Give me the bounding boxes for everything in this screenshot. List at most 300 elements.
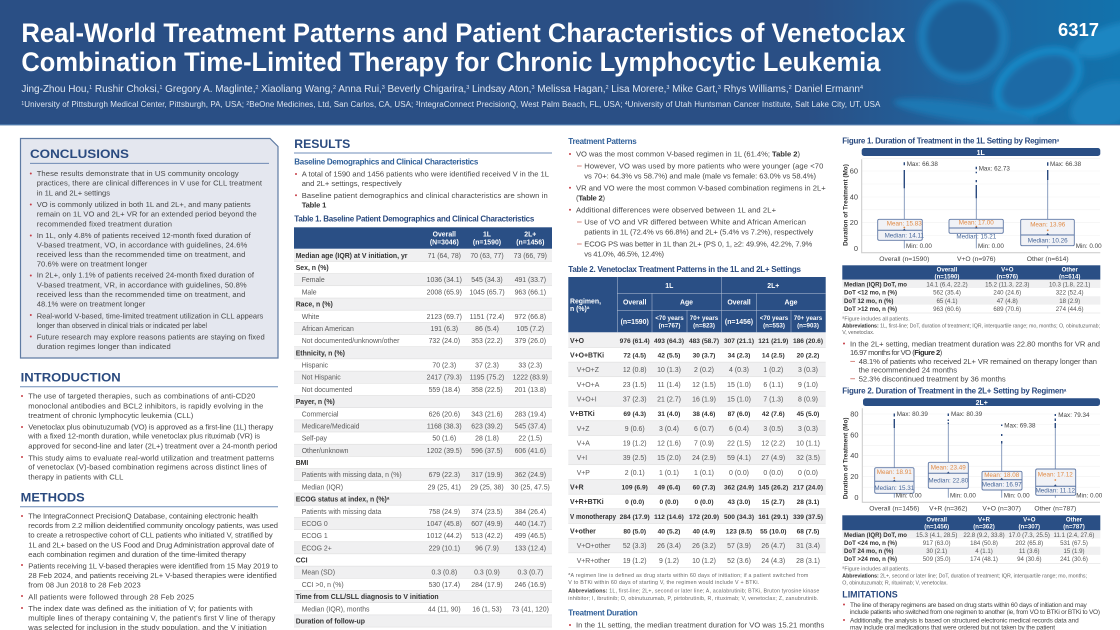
box plot: figure 2: V+R (n=362) bbox=[929, 506, 967, 513]
heading: limitations: LIMITATIONS bbox=[842, 589, 898, 600]
introduction bullets bbox=[21, 392, 277, 481]
table 2 header: Age bbox=[680, 300, 693, 307]
table 2 rows: 3 (0.5) bbox=[763, 426, 783, 433]
box plot: figure 2: 20 bbox=[850, 472, 858, 481]
table 2 footnotes bbox=[568, 572, 819, 602]
box: other 1L bbox=[1021, 161, 1102, 250]
figure 2 title: Figure 2. Duration of Treatment in the 2L+ Setting by Regimena bbox=[842, 387, 1067, 396]
figure 2 table: DoT 24 mo, n (%) bbox=[844, 548, 893, 555]
box: other 1L: Mean: 13.96 bbox=[1030, 222, 1066, 229]
table 2 rows: V+O+BTKi bbox=[570, 352, 604, 360]
table 2 rows: 3 (0.4) bbox=[659, 426, 679, 433]
table 2 footnotes: V to BTKi within 60 days of starting V, the regimen would include V + BTKi. bbox=[568, 580, 759, 586]
table 1 header: (N=3046) bbox=[430, 239, 459, 246]
table 1 rows: 201 (13.8) bbox=[515, 387, 546, 394]
table 1 rows: ECOG status at index, n (%)a bbox=[296, 495, 390, 504]
conclusions bullets: duration regimes longer than indicated bbox=[37, 342, 171, 351]
table 1 rows: 70 (2.3) bbox=[432, 362, 456, 370]
figure 2 table: 15 (1.9) bbox=[1063, 548, 1085, 555]
table 2 rows: V+other bbox=[570, 529, 596, 536]
table 2 rows: 0 (0.0) bbox=[763, 470, 783, 477]
table 1 rows: 246 (16.9) bbox=[515, 582, 546, 589]
table 1 rows: Patients with missing data bbox=[302, 509, 382, 516]
table 2 header: Age bbox=[784, 300, 798, 307]
title: Combination Time-Limited Therapy for Chronic Lymphocytic Leukemia bbox=[21, 47, 881, 77]
introduction bullets: approved for second-line and later (2L+) treatment over a 24-month period bbox=[28, 441, 277, 450]
table 1 rows: Hispanic bbox=[302, 362, 329, 370]
table 1 zebra shading bbox=[294, 249, 552, 627]
box: other 2L+: Min: 0.00 bbox=[1076, 493, 1103, 500]
box: V+R 2L+ bbox=[928, 411, 983, 500]
table 2 rows: 19 (1.2) bbox=[623, 558, 647, 565]
table 2 rows: 43 (3.0) bbox=[728, 499, 750, 506]
table 1 rows: 626 (20.6) bbox=[429, 411, 460, 418]
box: V+O 1L: Min: 0.00 bbox=[978, 243, 1004, 250]
figure 1 title: Figure 1. Duration of Treatment in the 1L Setting by Regimena bbox=[842, 136, 1059, 145]
treatment patterns bullets: Use of VO and VR differed between White and African American bbox=[584, 218, 806, 227]
table 2 header: (n=823) bbox=[693, 322, 715, 329]
treatment patterns bullets: Additional differences were observed between 1L and 2L+ bbox=[576, 206, 777, 215]
figure 2 table: 11.1 (2.4, 27.6) bbox=[1054, 532, 1094, 539]
table 2 rows: 32 (3.5) bbox=[796, 455, 820, 462]
table 2 rows: 40 (4.9) bbox=[693, 529, 715, 536]
box: V+R 2L+: Max: 80.39 bbox=[951, 411, 983, 418]
table 2 rows: 37 (2.3) bbox=[623, 396, 647, 404]
table 1 header: 2L+ bbox=[524, 232, 536, 239]
table 2 rows: 12 (0.8) bbox=[623, 367, 647, 374]
table 2 rows: 45 (5.0) bbox=[797, 411, 819, 418]
table 2 rows: 11 (1.4) bbox=[657, 382, 681, 389]
table 1 rows: 606 (41.6) bbox=[515, 448, 546, 455]
figure 2 footnotes: aFigure includes all patients. bbox=[842, 566, 910, 573]
table 2 rows: 6 (0.4) bbox=[729, 426, 749, 433]
table 2 title: Table 2. Venetoclax Treatment Patterns in the 1L and 2L+ Settings bbox=[568, 265, 802, 274]
table 1 rows: 1036 (34.1) bbox=[427, 277, 462, 284]
table 2 rows: 72 (4.5) bbox=[623, 352, 646, 360]
table 1 header bbox=[294, 227, 552, 249]
table 2 rows: 30 (3.7) bbox=[693, 352, 715, 360]
table 2 rows: 49 (6.4) bbox=[658, 484, 680, 492]
figure 2 table: V+O bbox=[1023, 516, 1036, 523]
figure 1 footnotes bbox=[842, 316, 1100, 336]
table 2 rows: 15 (2.0) bbox=[657, 455, 681, 462]
table 1 rows: 86 (5.4) bbox=[475, 326, 499, 333]
table 1 rows: 353 (22.2) bbox=[471, 338, 503, 345]
methods bullets: 28 Feb 2024, and patients receiving 2L+ V-based therapies were identified bbox=[28, 571, 277, 580]
introduction bullets: treatment of chronic lymphocytic leukemia (CLL) bbox=[28, 411, 194, 420]
table 2 rows: V+O+I bbox=[577, 396, 597, 404]
table 2 rows: 284 (17.9) bbox=[620, 514, 650, 521]
table 2 header: Regimen, bbox=[570, 299, 601, 306]
table 1 rows: 29 (25, 38) bbox=[470, 484, 504, 491]
conclusions bullets: In 2L+, only 1.1% of patients received 24-month fixed duration of bbox=[37, 271, 255, 280]
table 1 rows: Other/unknown bbox=[302, 448, 349, 455]
figure 2 table: DoT <24 mo, n (%) bbox=[844, 540, 897, 547]
table 2 rows: V+P bbox=[577, 470, 590, 477]
table 2 rows: 493 (64.3) bbox=[654, 338, 684, 345]
table 2 header: <70 years bbox=[655, 315, 684, 322]
figure 2 table: 11 (3.6) bbox=[1019, 548, 1040, 555]
table 1 header: 1L bbox=[483, 232, 491, 239]
table 1 header: (n=1456) bbox=[516, 239, 544, 246]
panel: results bbox=[294, 137, 552, 627]
table 1 rows: 596 (37.5) bbox=[471, 448, 503, 455]
table 2 rows: 172 (20.9) bbox=[689, 514, 719, 521]
poster number: 6317 bbox=[1058, 19, 1099, 40]
table 2 rows: 60 (7.3) bbox=[693, 484, 715, 492]
box: other 1L: Median: 10.26 bbox=[1028, 238, 1068, 245]
figure 1 table: DoT <12 mo, n (%) bbox=[844, 290, 897, 296]
treatment patterns bullets bbox=[569, 150, 826, 259]
panel: figure 1 bbox=[842, 136, 1102, 384]
table 1 rows: Commercial bbox=[302, 411, 339, 418]
methods bullets: multiple lines of therapy containing V, the patient's first V line of therapy bbox=[28, 614, 276, 623]
table 2 rows: 6 (1.1) bbox=[763, 382, 783, 389]
table 2 rows: 20 (2.2) bbox=[797, 352, 819, 360]
table 2 rows: 26 (3.4) bbox=[657, 543, 681, 550]
introduction bullets: monoclonal antibodies and BCL2 inhibitors, is rapidly evolving in the bbox=[28, 401, 263, 410]
figure 1 footnotes: V, venetoclax. bbox=[842, 330, 874, 336]
table 1 rows: African American bbox=[302, 326, 354, 333]
methods bullets: The IntegraConnect PrecisionQ Database, containing electronic health bbox=[28, 512, 258, 521]
limitations bullets: Additionally, the analysis is based on structured electronic medical records data and bbox=[850, 618, 1079, 624]
title: Real-World Treatment Patterns and Patient Characteristics of Venetoclax bbox=[21, 18, 906, 48]
box plot: figure 2: Other (n=787) bbox=[1034, 506, 1076, 513]
table 1 rows: 73 (41, 120) bbox=[512, 606, 549, 613]
table 1 header: (n=1590) bbox=[473, 239, 501, 246]
table 2 rows: 362 (24.9) bbox=[724, 484, 754, 492]
table 1 rows: 71 (64, 78) bbox=[428, 253, 461, 260]
figure 1 table: 10.3 (1.8, 22.1) bbox=[1049, 281, 1090, 288]
box: other 2L+ bbox=[1036, 412, 1103, 500]
conclusions bullets: VO is commonly utilized in both 1L and 2L+, and many patients bbox=[37, 200, 251, 209]
table 1 rows: 1012 (44.2) bbox=[427, 533, 462, 540]
table 1 rows: 33 (2.3) bbox=[518, 362, 542, 370]
table 1 rows: 513 (42.2) bbox=[471, 533, 503, 540]
conclusions bullets: V-based treatment, VO, in accordance with guidelines, 24.6% bbox=[37, 240, 248, 249]
table 1 rows: 30 (25, 47.5) bbox=[511, 484, 550, 491]
methods bullets: from 08 Jun 2018 to 28 Feb 2023 bbox=[28, 581, 141, 590]
table 2 rows: 27 (4.9) bbox=[761, 455, 785, 462]
box: overall 2L+: Min: 0.00 bbox=[896, 493, 922, 500]
table 2 rows: 500 (34.3) bbox=[724, 514, 754, 521]
table 2 header: (n=1456) bbox=[725, 319, 753, 326]
table 2 rows: 28 (3.1) bbox=[797, 499, 819, 506]
table 2 rows: 121 (21.9) bbox=[758, 338, 788, 345]
conclusions bullets: In 1L, only 4.8% of patients received 12-month fixed duration of bbox=[37, 231, 252, 240]
table 1 rows: 1047 (45.8) bbox=[427, 521, 462, 528]
table 1 title: Table 1. Baseline Patient Demographics and Clinical Characteristics bbox=[294, 215, 535, 224]
figure 1 follow-up bullets bbox=[843, 339, 1100, 384]
table 1 rows: Patients with missing data, n (%) bbox=[302, 472, 402, 479]
table 1 rows: Medicare/Medicaid bbox=[302, 424, 360, 430]
box: other 1L: Max: 66.38 bbox=[1050, 161, 1082, 168]
box: V+O 2L+: Mean: 18.08 bbox=[984, 472, 1020, 479]
table 1 rows: 70 (63, 77) bbox=[470, 253, 504, 260]
conclusions bullets: 70.6% were on treatment longer bbox=[37, 259, 148, 268]
table 2 rows: 34 (2.3) bbox=[728, 352, 750, 360]
box plot: figure 1: 0 bbox=[854, 244, 858, 253]
table 1 rows: Race, n (%) bbox=[296, 302, 333, 309]
table 2 rows: V+O+A bbox=[577, 382, 600, 389]
table 2 rows: 39 (2.5) bbox=[623, 455, 647, 462]
table 2 rows: 217 (24.0) bbox=[793, 484, 823, 492]
table 2 zebra shading bbox=[568, 333, 826, 553]
table 2 rows: 28 (3.1) bbox=[796, 558, 820, 565]
figure 2 table: Other bbox=[1066, 516, 1083, 523]
table 2 rows: 9 (0.6) bbox=[625, 426, 645, 433]
table 2 rows: 21 (2.7) bbox=[657, 396, 681, 404]
box: other 2L+: Max: 79.34 bbox=[1058, 412, 1090, 419]
figure 1 table: (n=614) bbox=[1059, 273, 1080, 280]
box: overall 2L+: Mean: 18.91 bbox=[877, 469, 912, 476]
table 2 rows: 109 (6.9) bbox=[621, 484, 648, 492]
table 1 rows: Median (IQR) bbox=[302, 484, 343, 491]
box: overall 1L: Min: 0.00 bbox=[906, 243, 932, 250]
table 1 rows: 679 (22.3) bbox=[429, 472, 460, 479]
introduction bullets: of venetoclax (V)-based combination regimens across distinct lines of bbox=[28, 463, 268, 472]
table 2 footnotes: Abbreviations: 1L, first-line; 2L+, second or later line; A, acalabrutinib; BTKi, Bruton tyrosine kinase bbox=[568, 589, 819, 595]
table 2 rows: 24 (2.9) bbox=[692, 455, 716, 462]
box plot: figure 1: Duration of Treatment (Mo) bbox=[842, 164, 850, 246]
table 2 rows: 2 (0.1) bbox=[625, 470, 645, 477]
table 2 rows: 24 (4.3) bbox=[761, 558, 785, 565]
conclusions bullets: Real-world V-based, time-limited treatment utilization in CLL appears bbox=[37, 312, 263, 321]
table 2 rows: 307 (21.1) bbox=[724, 338, 754, 345]
figure 1 table: V+O bbox=[1001, 266, 1014, 273]
table 2 rows: 6 (0.7) bbox=[694, 426, 714, 433]
table 1 rows: 358 (22.5) bbox=[471, 387, 503, 394]
table 1 rows: 16 (1, 53) bbox=[472, 606, 502, 613]
table 1 rows: 229 (10.1) bbox=[429, 545, 460, 552]
figure 2 table: (n=362) bbox=[973, 524, 995, 530]
box plot: figure 2: 0 bbox=[854, 493, 858, 502]
box: overall 1L bbox=[878, 161, 938, 250]
figure 1 table: 65 (4.1) bbox=[936, 298, 958, 305]
table 1 rows: 499 (46.5) bbox=[515, 533, 546, 540]
table 2 rows: 483 (58.7) bbox=[689, 338, 719, 345]
limitations bullets bbox=[843, 602, 1100, 630]
figure 1 table: Overall bbox=[937, 266, 958, 273]
table 1 rows: ECOG 0 bbox=[302, 521, 328, 528]
table 2 rows: 10 (1.2) bbox=[692, 558, 716, 565]
table 2 rows: 0 (0.0) bbox=[694, 499, 714, 506]
table 1 bbox=[294, 227, 552, 627]
table 1 rows: 0.3 (0.7) bbox=[517, 570, 543, 577]
limitations bullets: include patients who switched from one regimen to another (ie, from VO to BTKi or BTKi to VO) bbox=[850, 609, 1100, 616]
conclusions bullets: received less than the recommended time on treatment, and bbox=[37, 290, 245, 299]
conclusions bullets: recommended fixed treatment duration bbox=[37, 219, 172, 228]
figure 2 table: 531 (67.5) bbox=[1060, 540, 1088, 547]
table 1 row rules bbox=[294, 261, 552, 627]
figure 2 table: Overall bbox=[926, 516, 947, 523]
table 2 rows: 15 (2.7) bbox=[762, 499, 785, 506]
table 2 rows: 15 (1.0) bbox=[727, 382, 751, 389]
treatment patterns bullets: (Table 2) bbox=[576, 193, 605, 202]
box: other 1L: Min: 0.00 bbox=[1076, 243, 1102, 250]
table 2 rows: 2 (0.2) bbox=[694, 367, 714, 374]
table 1 rows: 191 (6.3) bbox=[431, 326, 458, 333]
figure 1 table: DoT 12 mo, n (%) bbox=[844, 298, 893, 305]
table 2 rows: 976 (61.4) bbox=[620, 338, 650, 345]
table 2 header: (n=903) bbox=[797, 322, 819, 329]
figure 2 footnotes: O, obinutuzumab; R, rituximab; V, venetoclax. bbox=[842, 580, 948, 586]
figure 1 table: (n=1590) bbox=[935, 273, 959, 280]
panel: conclusions bbox=[20, 138, 278, 358]
table 2 rows: 112 (14.6) bbox=[654, 514, 684, 521]
panel: introduction bbox=[20, 370, 278, 481]
table 2 rows: 57 (3.9) bbox=[727, 543, 751, 550]
title bbox=[21, 18, 906, 77]
table 2 rows: 12 (2.2) bbox=[761, 440, 785, 448]
table 1 rows: Mean (SD) bbox=[302, 570, 335, 577]
table 2 rows: 16 (1.9) bbox=[692, 396, 716, 404]
figure 1 follow-up bullets: 16.97 months for VO (Figure 2) bbox=[850, 348, 943, 357]
table 2 rows: V+R bbox=[570, 484, 584, 492]
figure 2 table bbox=[842, 515, 1100, 563]
conclusions bullets: Future research may explore reasons patients are staying on fixed bbox=[37, 333, 265, 342]
subheading: baseline demographics: Baseline Demographics and Clinical Characteristics bbox=[294, 158, 479, 167]
table 1 rows: 379 (26.0) bbox=[515, 338, 546, 345]
table 1 rows: 491 (33.7) bbox=[515, 277, 546, 284]
table 1 rows: BMI bbox=[296, 460, 308, 467]
table 2 header: Overall bbox=[727, 300, 751, 307]
table 2 rows: 7 (0.9) bbox=[694, 440, 714, 448]
box plot: figure 2: Duration of Treatment (Mo) bbox=[842, 417, 850, 499]
table 2 rows: 0 (0.0) bbox=[659, 499, 679, 506]
box: V+O 1L: Median: 15.21 bbox=[956, 233, 997, 240]
table 1 rows: 2008 (65.9) bbox=[427, 289, 462, 296]
table 1 rows: 530 (17.4) bbox=[429, 582, 460, 589]
treatment patterns bullets: However, VO was used by more patients who were younger (age <70 bbox=[584, 161, 823, 170]
table 2 rows: V+O+Z bbox=[577, 367, 599, 374]
table 1 rows: ECOG 2+ bbox=[302, 545, 332, 552]
figure 1 table bbox=[842, 265, 1100, 313]
figure 1 table: 562 (35.4) bbox=[933, 290, 961, 296]
treatment patterns bullets: vs 41.0%, 46.5%, 12.4%) bbox=[584, 250, 664, 259]
table 2 header: (n=1590) bbox=[621, 319, 649, 326]
table 2 rows: V+Z bbox=[577, 426, 590, 433]
introduction bullets: with a fixed 12-month duration, while venetoclax plus rituximab (VR) is bbox=[27, 432, 260, 441]
figure 2 banner bbox=[863, 398, 1100, 407]
figure 1 table: 15.2 (11.3, 22.3) bbox=[985, 281, 1029, 288]
table 2 rows: 52 (3.6) bbox=[727, 558, 751, 565]
table 2 rows: 80 (5.0) bbox=[623, 529, 646, 536]
table 1 rows: Not documented bbox=[302, 387, 352, 394]
affiliations: 1University of Pittsburgh Medical Center, Pittsburgh, PA, USA; 2BeOne Medicines, Ltd, San Carlos, CA, USA; 3IntegraConnect PrecisionQ, West Palm Beach, FL, USA; 4University of Utah Huntsman Cancer Institute, Salt Lake City, UT, USA bbox=[21, 100, 881, 109]
table 2 rows: 31 (4.0) bbox=[658, 411, 680, 418]
table 2 rows: 14 (2.5) bbox=[762, 352, 785, 360]
table 1 header: Overall bbox=[433, 232, 456, 239]
figure 1 table: Other bbox=[1062, 266, 1078, 273]
box plot: figure 2: 80 bbox=[850, 410, 858, 418]
table 1 rows: Duration of follow-up bbox=[296, 618, 365, 626]
table 2 rows: 10 (1.3) bbox=[657, 367, 681, 374]
box plot: figure 2: V+O (n=307) bbox=[982, 506, 1021, 513]
table 1 rows: Female bbox=[302, 277, 325, 284]
treatment patterns bullets: patients in 1L (72.4% vs 66.8%) and 2L+ (5.4% vs 7.2%), respectively bbox=[584, 228, 814, 237]
table 2 rows: 3 (0.3) bbox=[798, 367, 818, 374]
figure 1 table: 689 (70.6) bbox=[993, 306, 1021, 313]
figure 2 table: 15.3 (4.1, 28.5) bbox=[916, 532, 957, 539]
figure 2 table: Median (IQR) DoT, mo bbox=[844, 532, 907, 539]
table 1 rows: Median (IQR), months bbox=[302, 606, 370, 613]
methods bullets: 1L and 2L+ based on the US Food and Drug Administration approval date of bbox=[28, 540, 275, 549]
figure 2 table: (n=307) bbox=[1019, 524, 1040, 530]
conclusions bullets: received less than the recommended time on treatment, and bbox=[37, 250, 245, 259]
results bullets bbox=[295, 170, 549, 210]
conclusions bullets: 48.1% were on treatment longer bbox=[37, 300, 146, 309]
figure 1 table: 240 (24.6) bbox=[993, 290, 1021, 296]
table 2 rows: V+O bbox=[570, 338, 585, 345]
box: V+O 1L: Mean: 17.00 bbox=[959, 220, 994, 227]
treatment duration bullet: In the 1L setting, the median treatment duration for VO was 15.21 months bbox=[576, 621, 825, 630]
table 1 rows: 545 (34.3) bbox=[471, 277, 503, 284]
table 2 header: 2L+ bbox=[767, 283, 779, 290]
table 2 rows: 69 (4.3) bbox=[623, 411, 646, 418]
figure 2 table: 30 (2.1) bbox=[926, 548, 947, 555]
figure 1 table: 963 (60.6) bbox=[933, 306, 961, 313]
figure 2 banner: 2L+ bbox=[976, 400, 988, 407]
table 2 rows: 31 (3.4) bbox=[796, 543, 820, 550]
box: overall 1L: Median: 14.11 bbox=[885, 232, 925, 239]
table 2 bbox=[568, 277, 826, 568]
introduction bullets: therapy in patients with CLL bbox=[28, 472, 123, 481]
conclusions bullets bbox=[30, 169, 265, 351]
box plot: figure 1: Other (n=614) bbox=[1027, 256, 1069, 263]
subheading: treatment patterns: Treatment Patterns bbox=[568, 137, 637, 146]
table 1 rows: 2417 (79.3) bbox=[427, 375, 462, 382]
figure 1 footnotes: aFigure includes all patients. bbox=[842, 316, 910, 323]
box: V+R 2L+: Min: 0.00 bbox=[950, 493, 976, 500]
table 2 rows bbox=[570, 338, 823, 565]
panel: methods bbox=[20, 491, 278, 630]
table 2 row rules bbox=[568, 348, 826, 568]
panel: figure 2 bbox=[842, 387, 1103, 586]
table 1 rows: 317 (19.9) bbox=[471, 472, 503, 479]
table 1 rows: 374 (23.5) bbox=[471, 509, 503, 516]
heading: methods: METHODS bbox=[21, 491, 85, 505]
table 1 rows: 29 (25, 41) bbox=[428, 484, 461, 491]
table 1 rows: Not documented/unknown/other bbox=[302, 338, 400, 345]
table 2 rows: 59 (4.1) bbox=[727, 455, 751, 462]
conclusions bullets: practices, there are clinical differences in V use for CLL treatment bbox=[37, 179, 263, 188]
table 2 rows: 68 (7.5) bbox=[797, 529, 819, 536]
conclusions bullets: These results demonstrate that in US community oncology bbox=[37, 169, 239, 178]
table 1 rows bbox=[296, 253, 550, 626]
table 2 rows: 55 (10.0) bbox=[760, 529, 787, 536]
table 1 rows: 1045 (65.7) bbox=[469, 289, 505, 296]
table 2 rows: 42 (5.5) bbox=[658, 352, 680, 360]
table 1 rows: 0.3 (0.9) bbox=[474, 570, 500, 577]
table 1 rows: Median age (IQR) at V initiation, yr bbox=[296, 253, 408, 260]
box: overall 2L+: Max: 80.39 bbox=[897, 411, 928, 418]
table 2 rows: 161 (29.1) bbox=[758, 514, 788, 521]
box: V+R 2L+: Mean: 23.49 bbox=[931, 464, 966, 471]
table 2 rows: 339 (37.5) bbox=[793, 514, 823, 521]
table 2 rows: 123 (8.5) bbox=[726, 529, 752, 536]
authors: Jing-Zhou Hou,1 Rushir Choksi,1 Gregory A. Maglinte,2 Xiaoliang Wang,2 Anna Rui,3 Beverly Chigarira,3 Lindsay Aton,3 Melissa Hagan,2 Lisa Morere,3 Mike Gart,3 Rhys Williams,2 Daniel Ermann4 bbox=[21, 84, 863, 95]
table 1 rows: 73 (66, 79) bbox=[514, 253, 547, 260]
methods bullets: The index date was defined as the initiation of V; for patients with bbox=[28, 604, 253, 613]
table 1 rows: 44 (11, 90) bbox=[428, 606, 461, 613]
figure 1 follow-up bullets: the recommended 24 months bbox=[859, 366, 957, 375]
table 2 header: (n=767) bbox=[659, 322, 680, 329]
table 2 rows: V+R+BTKi bbox=[570, 499, 604, 506]
results bullets: Table 1 bbox=[302, 201, 327, 210]
table 1 rows: CCI bbox=[296, 558, 308, 564]
treatment patterns bullets: VO was the most common V-based regimen in 1L (61.4%; Table 2) bbox=[576, 150, 800, 159]
